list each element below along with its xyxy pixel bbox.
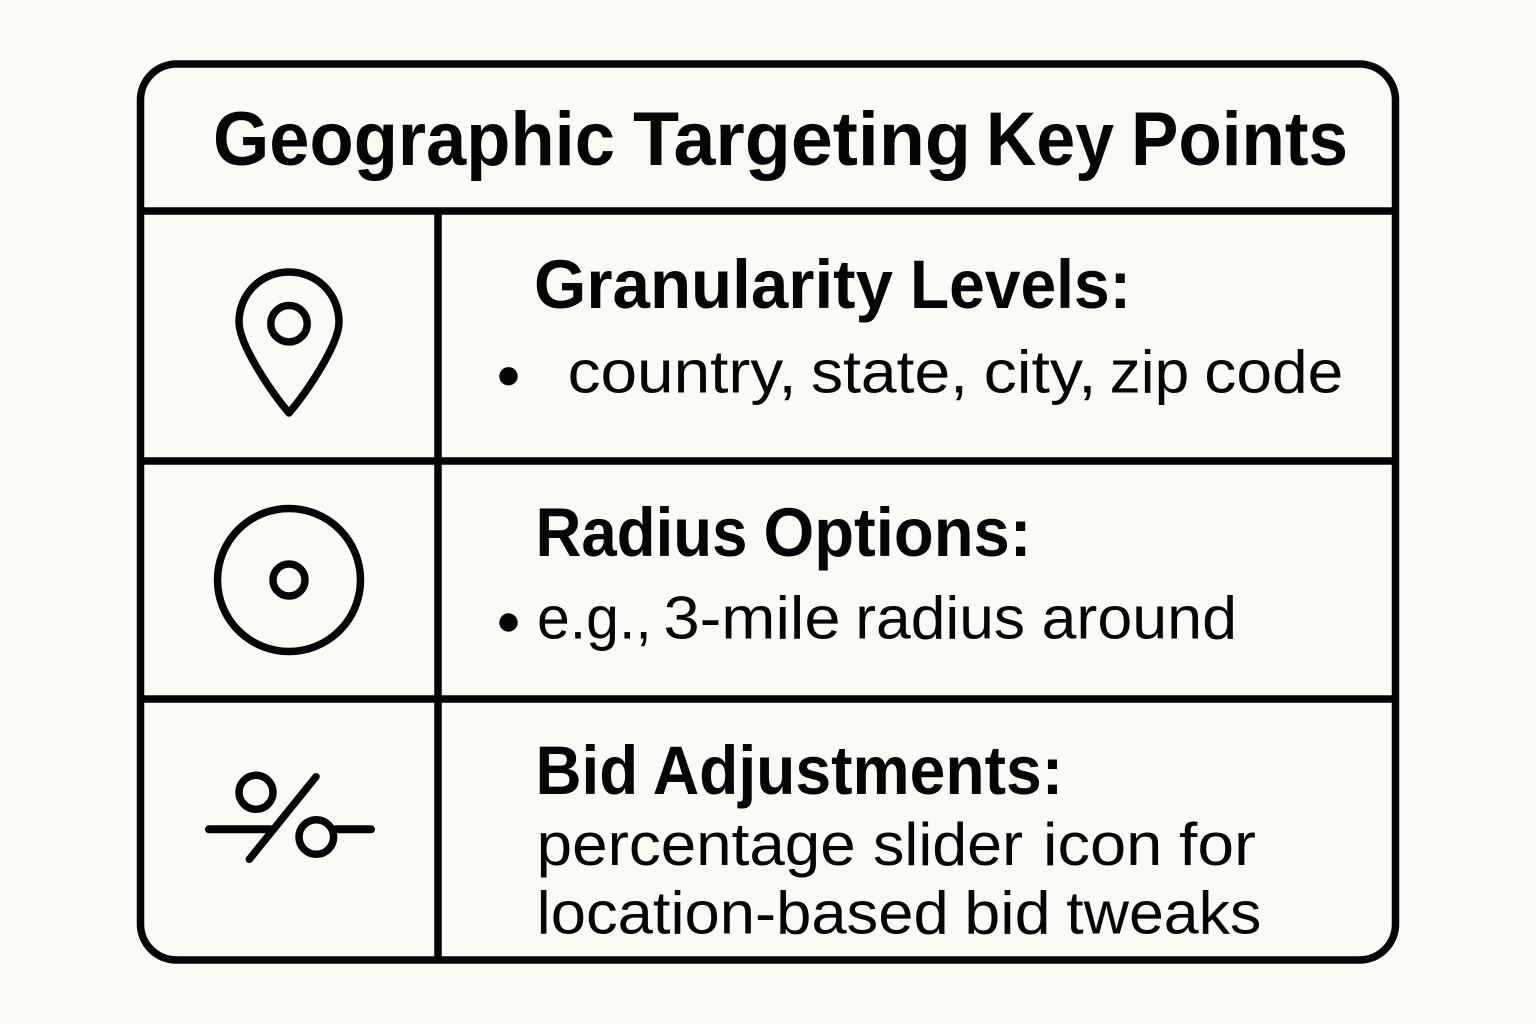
title: Geographic <box>213 97 615 182</box>
icon: radius circle <box>218 508 360 652</box>
row 3 text: slider <box>873 811 1023 878</box>
title: Points <box>1131 97 1348 182</box>
row 2 text: radius <box>855 584 1025 651</box>
row 2 heading: Radius <box>536 494 748 571</box>
title: Targeting <box>633 97 971 182</box>
row 2 bullet <box>499 613 518 632</box>
row 3 text <box>537 811 1261 946</box>
row 2 text: around <box>1042 584 1237 651</box>
icon: percentage slider <box>209 775 371 859</box>
row 3 text: location-based <box>537 879 949 946</box>
title <box>213 97 1348 182</box>
row 2 heading <box>536 494 1032 571</box>
row 1 text: city, <box>984 338 1097 406</box>
row 3 text: for <box>1179 811 1256 878</box>
title: Key <box>986 97 1114 182</box>
row 1 heading: Levels: <box>910 246 1131 323</box>
row 2 text: e.g., <box>537 584 652 651</box>
row 3 text: icon <box>1043 811 1162 878</box>
row 3 heading: Bid <box>536 732 638 809</box>
icon: location pin <box>239 272 339 413</box>
row 1 bullet <box>499 367 518 385</box>
row 3 text: percentage <box>537 811 856 878</box>
row 1 text: state, <box>811 338 968 406</box>
row 3 text: tweaks <box>1066 879 1261 946</box>
row 1 heading: Granularity <box>534 246 893 323</box>
row 2 text <box>537 584 1237 651</box>
table panel <box>140 64 1396 960</box>
row 2 text: 3-mile <box>664 584 840 651</box>
row 1 text: country, <box>568 338 797 406</box>
row 3 heading: Adjustments: <box>653 732 1063 809</box>
row 1 text: code <box>1204 338 1343 406</box>
row 1 text: zip <box>1110 338 1189 406</box>
row 3 text: bid <box>964 879 1051 946</box>
row 1 heading <box>534 246 1131 323</box>
row 2 heading: Options: <box>764 494 1032 571</box>
row 1 text <box>568 338 1343 406</box>
